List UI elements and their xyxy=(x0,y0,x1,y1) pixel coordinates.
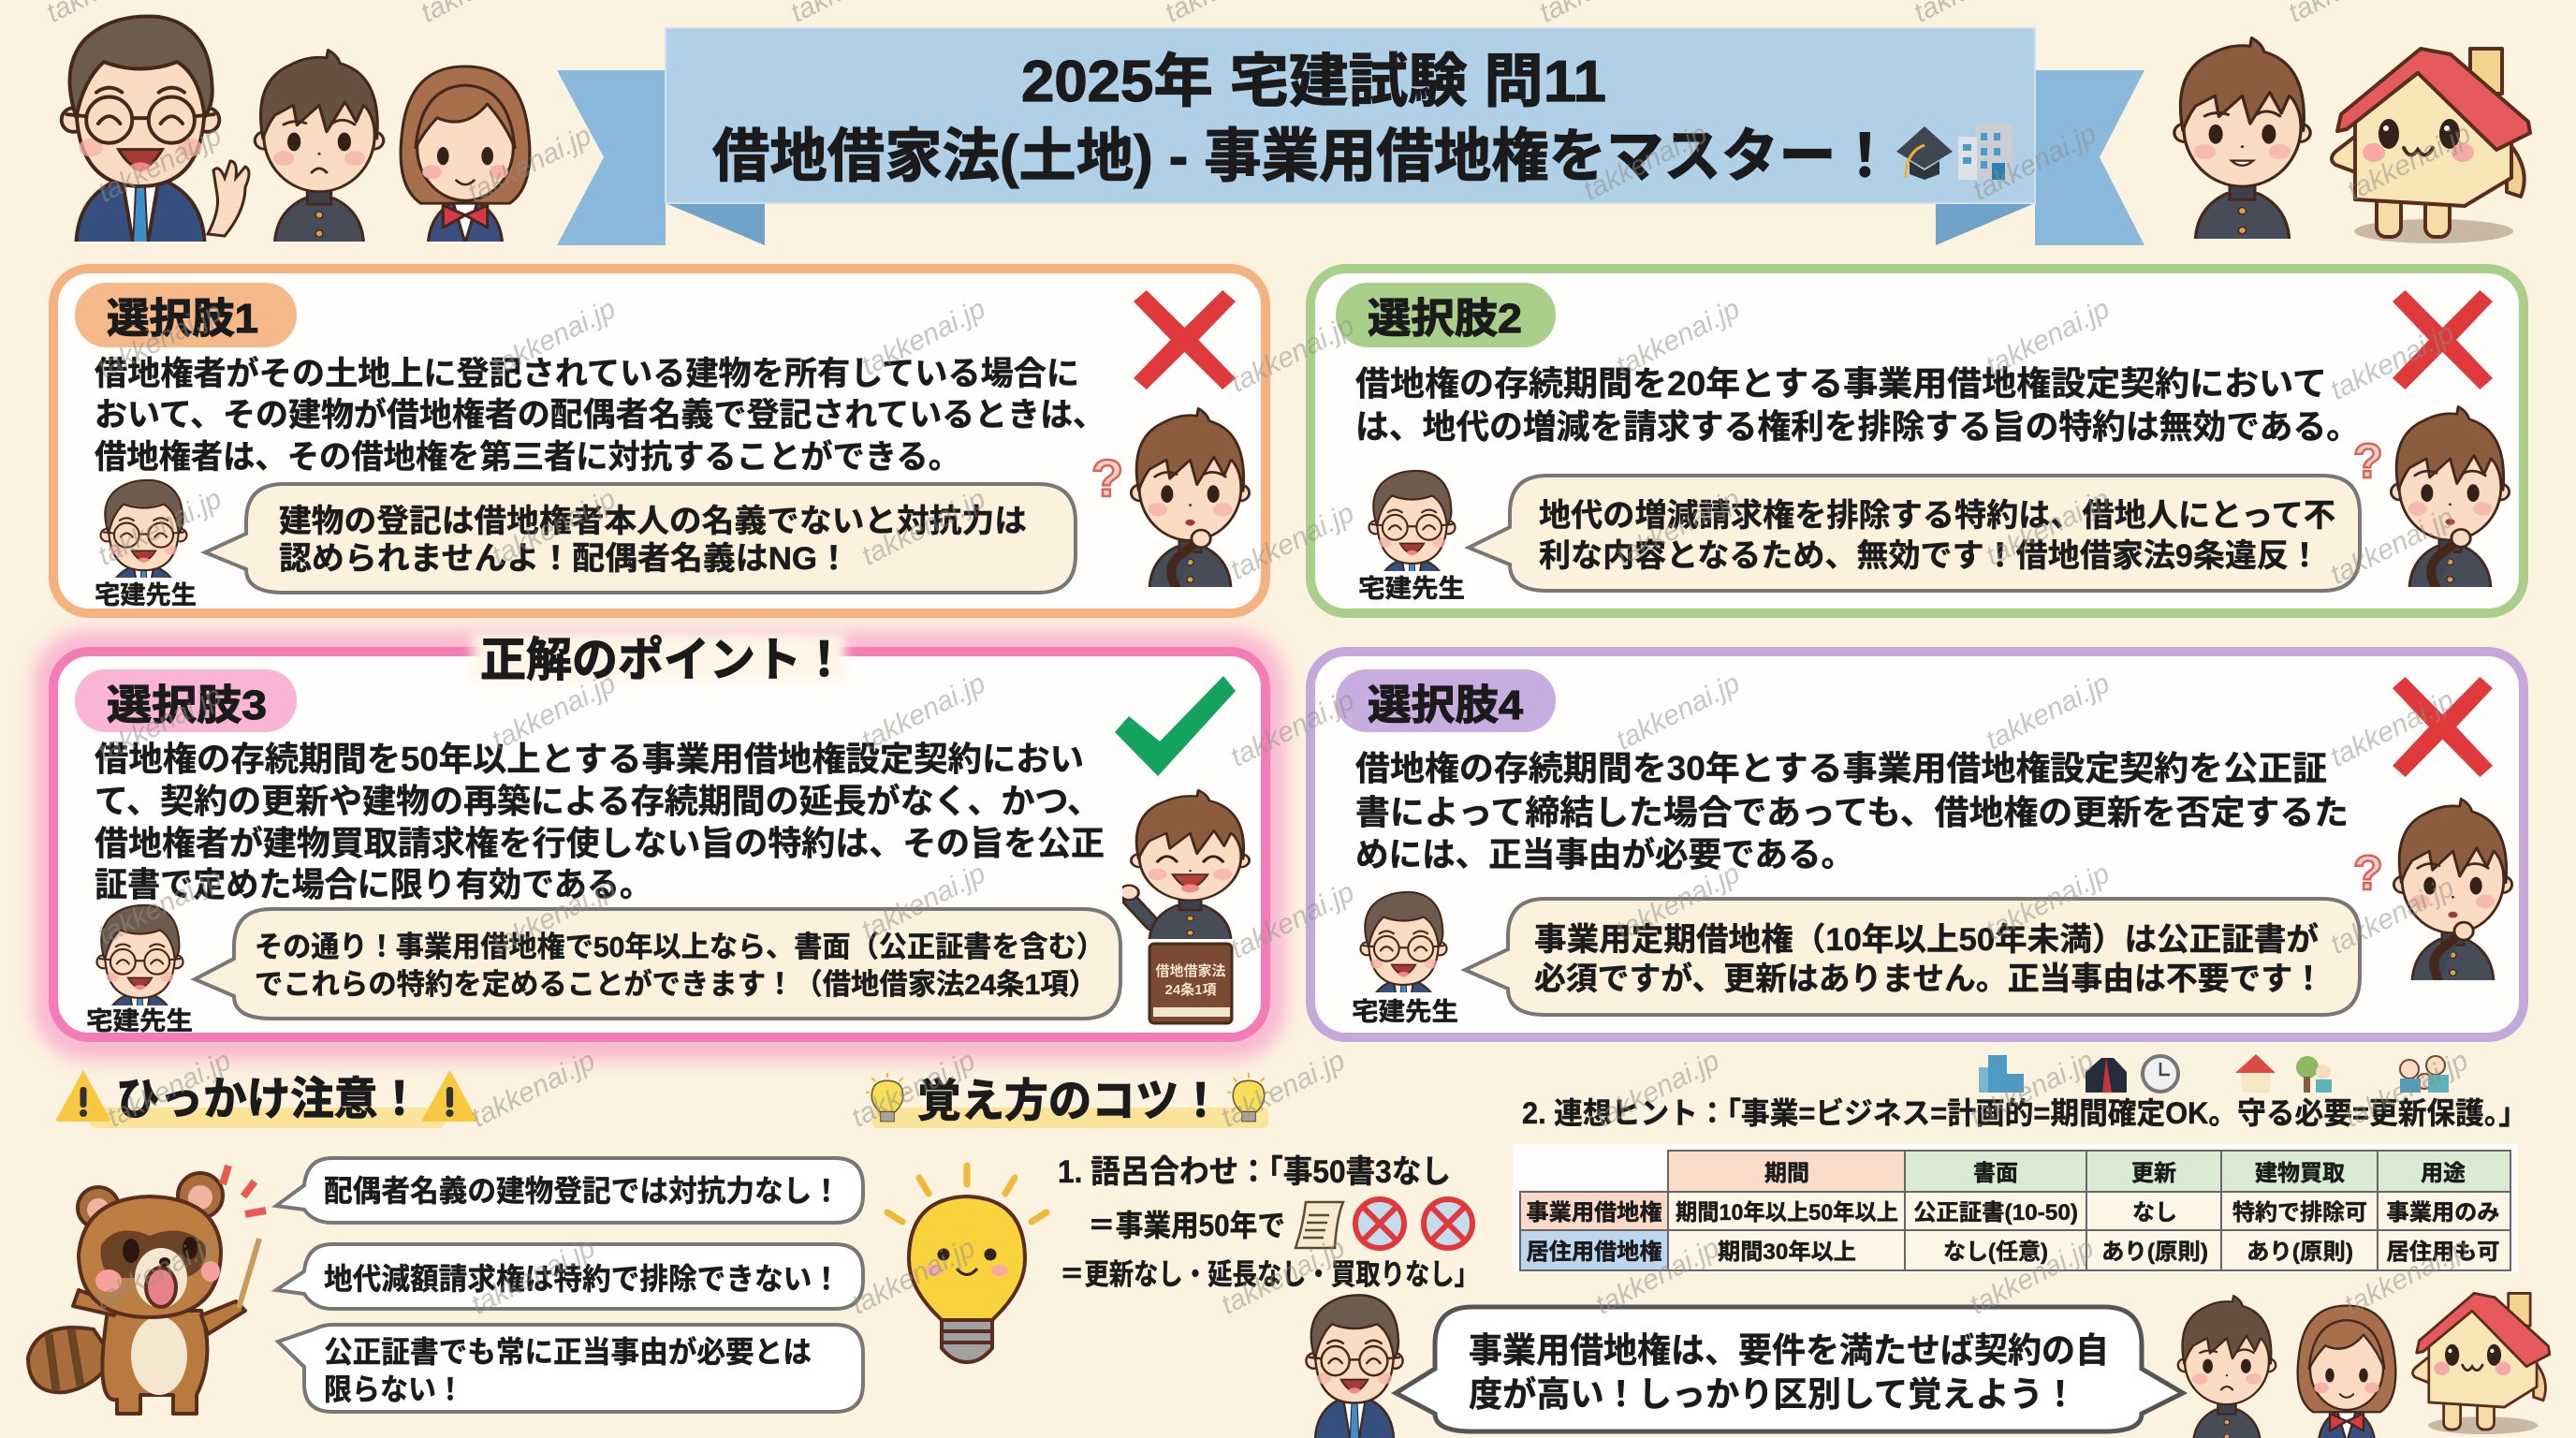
ribbon tail: left xyxy=(557,70,666,245)
text: takkenai.jp xyxy=(1225,876,1359,965)
comparison table: 書面 xyxy=(1973,1161,2018,1186)
comparison table xyxy=(1513,1144,2518,1272)
tag: option 2: 選択肢2 xyxy=(1368,296,1522,342)
text: takkenai.jp xyxy=(93,120,227,209)
question text: 借地権の存続期間を50年以上とする事業用借地権設定契約におい xyxy=(95,740,1084,778)
comparison table: 期間 xyxy=(1764,1161,1809,1186)
question text xyxy=(1355,364,2360,446)
banner panel xyxy=(666,28,2035,203)
text: takkenai.jp xyxy=(1578,118,1712,207)
icon: document scroll xyxy=(1295,1202,1343,1248)
text: takkenai.jp xyxy=(90,1227,224,1316)
question text: 借地権者がその土地上に登記されている建物を所有している場合に xyxy=(95,356,1079,392)
comparison table: 居住用も可 xyxy=(2387,1240,2499,1265)
text: takkenai.jp xyxy=(487,293,621,382)
student boy xyxy=(2178,1296,2276,1438)
bubble: trap 1 xyxy=(276,1158,863,1223)
icon: wrong mark xyxy=(1134,290,1236,389)
icon: graduation cap xyxy=(1896,126,1953,180)
heading: memory tips xyxy=(866,1073,1270,1128)
tag: option 1 xyxy=(75,283,297,347)
heading: memory tips: 覚え方のコツ！ xyxy=(917,1077,1222,1126)
mnemonic text: 1. 語呂合わせ：「事50書3なし xyxy=(1058,1154,1451,1190)
panel: option 2 xyxy=(1310,269,2524,613)
panel: option 3 (correct answer) xyxy=(47,633,1272,1047)
teacher avatar: 宅建先生 xyxy=(1358,575,1465,603)
title banner xyxy=(557,28,2144,245)
tag: option 3 xyxy=(75,669,297,732)
text: takkenai.jp xyxy=(1968,118,2101,207)
text: takkenai.jp xyxy=(846,1232,980,1321)
panel: option 4 xyxy=(1310,652,2524,1037)
text: takkenai.jp xyxy=(466,1232,600,1321)
closing speech bubble: 事業用借地権は、要件を満たせば契約の自 xyxy=(1469,1331,2109,1370)
question text xyxy=(1355,749,2349,873)
student boy xyxy=(255,50,384,242)
teacher speech bubble: その通り！事業用借地権で50年以上なら、書面（公正証書を含む） xyxy=(255,931,1105,963)
question text: 証書で定めた場合に限り有効である。 xyxy=(95,865,652,903)
text: takkenai.jp xyxy=(1981,858,2115,946)
text: takkenai.jp xyxy=(462,120,596,209)
confused student xyxy=(1091,408,1250,588)
question text: て、契約の更新や建物の再築による存続期間の延長がなく、かつ、 xyxy=(95,782,1101,820)
text: takkenai.jp xyxy=(487,668,621,756)
text: takkenai.jp xyxy=(466,1045,600,1134)
text: takkenai.jp xyxy=(93,680,227,769)
ribbon folds xyxy=(666,203,2035,245)
bubble: trap 2 xyxy=(276,1244,863,1309)
text: takkenai.jp xyxy=(1981,483,2115,572)
section: hint and comparison table xyxy=(1513,1054,2527,1272)
ribbon tail: right xyxy=(2035,70,2144,245)
text: takkenai.jp xyxy=(2342,118,2476,207)
question text: めには、正当事由が必要である。 xyxy=(1355,835,1854,873)
tag: option 4: 選択肢4 xyxy=(1368,682,1524,728)
question text: 借地権の存続期間を30年とする事業用借地権設定契約を公正証 xyxy=(1355,749,2327,787)
icon: office building xyxy=(1958,124,2012,180)
teacher speech bubble: 利な内容となるため、無効です！借地借家法9条違反！ xyxy=(1539,538,2320,574)
teacher speech bubble: 地代の増減請求権を排除する特約は、借地人にとって不 xyxy=(1539,498,2335,534)
tag: option 4 xyxy=(1336,669,1556,732)
question text xyxy=(95,740,1105,903)
title text: 借地借家法(土地) - 事業用借地権をマスター！ xyxy=(712,125,1894,189)
text: takkenai.jp xyxy=(2325,872,2459,961)
comparison table: 期間10年以上50年以上 xyxy=(1676,1200,1898,1225)
comparison table: 事業用借地権 xyxy=(1526,1200,1662,1225)
confused student xyxy=(2353,799,2512,981)
student girl xyxy=(401,66,530,242)
text: takkenai.jp xyxy=(2325,502,2459,591)
question text: は、地代の増減を請求する権利を排除する旨の特約は無効である。 xyxy=(1355,407,2360,446)
text: takkenai.jp xyxy=(1590,1045,1724,1134)
teacher xyxy=(1306,1295,1403,1438)
text: takkenai.jp xyxy=(2339,1232,2473,1321)
house mascot xyxy=(2413,1293,2550,1434)
text: takkenai.jp xyxy=(1965,1232,2099,1321)
text: takkenai.jp xyxy=(487,483,621,572)
mnemonic text: ＝事業用50年で xyxy=(1088,1209,1285,1242)
panel: option 1 xyxy=(53,269,1266,613)
text: takkenai.jp xyxy=(102,1045,236,1134)
section: memory tips xyxy=(866,1073,1479,1362)
icon: law book: 借地借家法 xyxy=(1155,962,1226,979)
comparison table: 特約で排除可 xyxy=(2232,1200,2367,1225)
closing speech bubble xyxy=(1396,1307,2183,1431)
mnemonic text: ＝更新なし・延長なし・買取りなし」 xyxy=(1060,1258,1479,1291)
characters: top left trio xyxy=(62,16,530,243)
question text xyxy=(95,356,1105,476)
text: takkenai.jp xyxy=(1611,858,1745,946)
text: takkenai.jp xyxy=(1611,668,1745,756)
teacher avatar: 宅建先生 xyxy=(1352,998,1458,1026)
icon: wrong mark xyxy=(2393,290,2493,389)
association hint: 2. 連想ヒント：「事業=ビジネス=計画的=期間確定OK。守る必要=更新保護。」 xyxy=(1522,1096,2527,1130)
text: takkenai.jp xyxy=(93,483,227,572)
teacher avatar: 宅建先生 xyxy=(86,1007,193,1035)
confused student: ? xyxy=(2353,434,2383,489)
comparison table: 建物買取 xyxy=(2255,1161,2345,1186)
bubble: trap 1: 配偶者名義の建物登記では対抗力なし！ xyxy=(324,1174,841,1208)
teacher speech bubble: 事業用定期借地権（10年以上50年未満）は公正証書が xyxy=(1534,921,2319,958)
question text: 書によって締結した場合であっても、借地権の更新を否定するた xyxy=(1355,793,2349,831)
icon: smiling light bulb xyxy=(887,1166,1046,1362)
teacher speech bubble: 建物の登記は借地権者本人の名義でないと対抗力は xyxy=(279,504,1027,539)
section: trap warnings xyxy=(28,1070,863,1414)
mnemonic text xyxy=(1058,1154,1479,1291)
teacher speech bubble: でこれらの特約を定めることができます！（借地借家法24条1項） xyxy=(255,968,1097,1001)
teacher avatar xyxy=(86,905,193,1035)
teacher speech bubble xyxy=(1465,899,2360,1015)
confused student xyxy=(2353,406,2510,588)
text: takkenai.jp xyxy=(93,862,227,951)
comparison table: 居住用借地権 xyxy=(1526,1240,1662,1265)
tag: option 2 xyxy=(1336,283,1556,347)
text: takkenai.jp xyxy=(856,858,990,946)
icon: correct check mark xyxy=(1115,676,1236,776)
text: takkenai.jp xyxy=(487,872,621,961)
hint icons xyxy=(1979,1054,2449,1093)
text: takkenai.jp xyxy=(1981,668,2115,756)
text: takkenai.jp xyxy=(1611,293,1745,382)
text: takkenai.jp xyxy=(93,296,227,385)
comparison table: 用途 xyxy=(2421,1161,2466,1186)
title text xyxy=(712,50,1894,189)
confused student: ? xyxy=(2353,846,2383,901)
comparison table: 事業用のみ xyxy=(2387,1200,2499,1225)
text: takkenai.jp xyxy=(1981,293,2115,382)
comparison table: 公正証書(10-50) xyxy=(1913,1200,2078,1225)
teacher speech bubble: 必須ですが、更新はありません。正当事由は不要です！ xyxy=(1534,961,2324,997)
bubble: trap 2: 地代減額請求権は特約で排除できない！ xyxy=(324,1262,841,1296)
text: takkenai.jp xyxy=(856,293,990,382)
heading: correct point: 正解のポイント！ xyxy=(480,634,847,686)
comparison table: あり(原則) xyxy=(2101,1240,2208,1265)
heading: trap warning: ひっかけ注意！ xyxy=(116,1075,421,1124)
question text: 借地権者は、その借地権を第三者に対抗することができる。 xyxy=(95,439,960,476)
icon: law book: 24条1項 xyxy=(1164,982,1217,998)
student girl xyxy=(2298,1306,2395,1438)
text: takkenai.jp xyxy=(1216,1232,1350,1321)
text: takkenai.jp xyxy=(2325,684,2459,773)
question text: 借地権者が建物買取請求権を行使しない旨の特約は、その旨を公正 xyxy=(95,824,1105,862)
teacher speech bubble xyxy=(205,484,1076,593)
confused student: ? xyxy=(1091,448,1123,507)
text: takkenai.jp xyxy=(1216,1045,1350,1134)
teacher avatar xyxy=(1352,892,1458,1026)
text: takkenai.jp xyxy=(1225,310,1359,399)
text: takkenai.jp xyxy=(2325,317,2459,406)
teacher speech bubble: 認められませんよ！配偶者名義はNG！ xyxy=(279,541,850,577)
question text: 借地権の存続期間を20年とする事業用借地権設定契約において xyxy=(1355,364,2327,403)
house mascot xyxy=(2332,49,2530,243)
happy student xyxy=(1120,790,1250,940)
icon: law book xyxy=(1149,944,1232,1023)
comparison table: 更新 xyxy=(2131,1161,2176,1186)
comparison table: 期間30年以上 xyxy=(1718,1240,1856,1265)
teacher avatar: 宅建先生 xyxy=(95,581,197,609)
teacher speech bubble xyxy=(1469,476,2360,591)
tag: option 3: 選択肢3 xyxy=(107,682,267,728)
student boy xyxy=(2174,37,2310,240)
text: takkenai.jp xyxy=(1225,684,1359,773)
title text: 2025年 宅建試験 問11 xyxy=(1021,50,1606,114)
text: takkenai.jp xyxy=(1590,1232,1724,1321)
teacher xyxy=(62,16,249,243)
text: takkenai.jp xyxy=(846,1045,980,1134)
closing speech bubble: 度が高い！しっかり区別して覚えよう！ xyxy=(1469,1375,2077,1414)
text: takkenai.jp xyxy=(1611,483,1745,572)
teacher avatar xyxy=(95,480,197,609)
comparison table: あり(原則) xyxy=(2247,1240,2353,1265)
mascot: tanuki with pointer xyxy=(28,1166,266,1414)
text: takkenai.jp xyxy=(1965,1045,2099,1134)
tag: option 1: 選択肢1 xyxy=(107,296,258,342)
comparison table: なし xyxy=(2132,1200,2177,1225)
characters: top right pair xyxy=(2174,37,2530,243)
teacher speech bubble xyxy=(195,909,1120,1019)
closing scene xyxy=(1306,1293,2550,1438)
teacher avatar xyxy=(1358,471,1465,603)
text: takkenai.jp xyxy=(2339,1045,2473,1134)
icon: wrong mark xyxy=(2393,677,2493,777)
heading: trap warning xyxy=(56,1070,477,1128)
text: takkenai.jp xyxy=(856,483,990,572)
comparison table: なし(任意) xyxy=(1943,1240,2048,1265)
icon: crossed-out circles xyxy=(1355,1199,1472,1248)
text: takkenai.jp xyxy=(1225,497,1359,586)
text: takkenai.jp xyxy=(856,668,990,756)
bubble: trap 3: 限らない！ xyxy=(324,1372,464,1406)
question text: おいて、その建物が借地権者の配偶者名義で登記されているときは、 xyxy=(95,397,1105,433)
bubble: trap 3: 公正証書でも常に正当事由が必要とは xyxy=(324,1335,812,1369)
bubble: trap 3 xyxy=(278,1325,863,1412)
